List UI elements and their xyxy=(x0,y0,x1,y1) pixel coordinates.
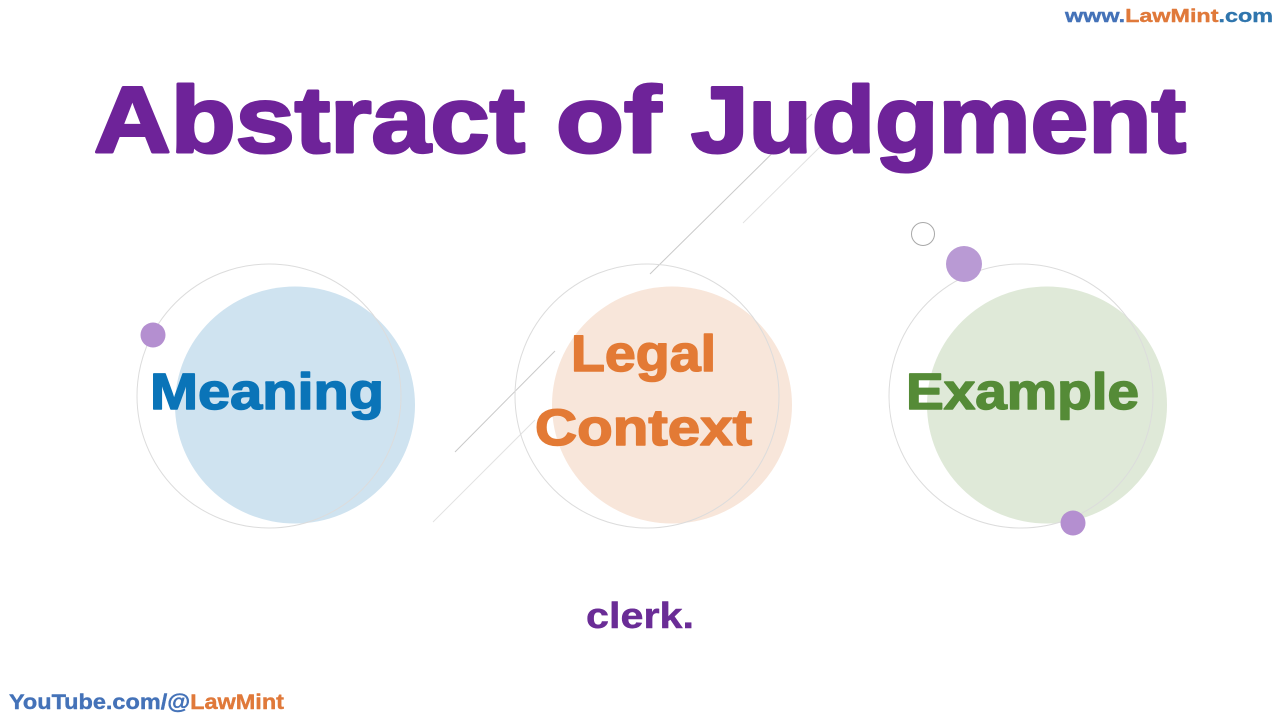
meaning accent dot xyxy=(140,322,166,348)
youtube label: YouTube.com/@ LawMint xyxy=(9,691,284,714)
title: Abstract xyxy=(94,67,525,172)
title: of xyxy=(556,67,662,172)
title xyxy=(94,67,1186,172)
example open circle xyxy=(912,222,934,246)
panel: meaning xyxy=(137,264,415,528)
legal context label: Context xyxy=(535,399,752,456)
example label: Example xyxy=(906,363,1139,420)
legal context filled circle xyxy=(552,286,792,524)
website label: www. LawMint .com xyxy=(1064,5,1273,26)
meaning filled circle xyxy=(175,286,415,524)
legal context label xyxy=(535,325,752,456)
example top accent dot xyxy=(946,246,982,282)
example bottom accent dot xyxy=(1060,510,1086,536)
panel: legal context xyxy=(515,264,792,528)
panel: example xyxy=(889,222,1167,536)
title: Judgment xyxy=(691,67,1186,172)
caption: clerk. xyxy=(586,595,694,636)
meaning label: Meaning xyxy=(150,363,384,420)
example filled circle xyxy=(927,286,1167,524)
legal context label: Legal xyxy=(571,325,716,382)
